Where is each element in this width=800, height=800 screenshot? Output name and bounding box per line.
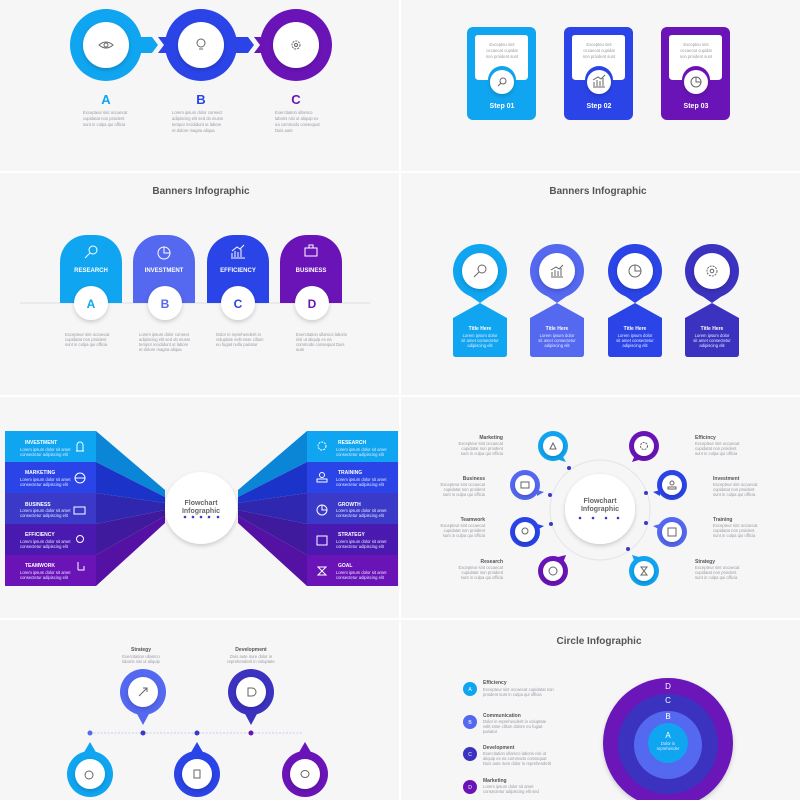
tab texts: Lorem ipsum dolor consect bbox=[139, 332, 190, 337]
text blocks ABC: Lorem ipsum dolor consect bbox=[172, 110, 223, 115]
node business bbox=[441, 470, 544, 500]
node investment bbox=[653, 470, 758, 500]
node business: cupidatat non proident bbox=[444, 487, 486, 492]
pin 3: Title Here bbox=[624, 326, 647, 332]
node teamwork: sunt in culpa qui officia bbox=[443, 533, 486, 538]
left bands: BUSINESS bbox=[25, 502, 51, 508]
left bands: Lorem ipsum dolor sit amet bbox=[20, 508, 71, 513]
pin 3: Lorem ipsum dolor bbox=[618, 333, 653, 338]
panel: banner pins bbox=[453, 186, 739, 357]
fan right bbox=[238, 431, 307, 586]
node strategy: Excepteur sint occaecat bbox=[695, 565, 740, 570]
tab business: D bbox=[308, 297, 317, 311]
node business: Business bbox=[463, 476, 485, 482]
panel: step cards bbox=[467, 27, 730, 120]
pin 4 bbox=[685, 244, 739, 357]
right bands: Lorem ipsum dolor sit amet bbox=[336, 539, 387, 544]
pin 3: adipiscing elit bbox=[622, 343, 648, 348]
right bands: consectetur adipiscing elit bbox=[336, 544, 385, 549]
card step 01: Step 01 bbox=[490, 103, 515, 110]
heading: Circle Infographic bbox=[556, 636, 642, 647]
node efficiency: cupidatat non proident bbox=[695, 446, 737, 451]
list items: velit esse cillum dolore eu fugiat bbox=[483, 724, 543, 729]
list items: aliquip ex ea commodo consequat bbox=[483, 756, 547, 761]
center circle: Infographic bbox=[182, 508, 220, 515]
tab investment bbox=[133, 235, 195, 320]
left bands: TEAMWORK bbox=[25, 563, 55, 569]
left bands: INVESTMENT bbox=[25, 440, 57, 446]
node training: Excepteur sint occaecat bbox=[713, 523, 758, 528]
center circle bbox=[565, 474, 635, 544]
node strategy: cupidatat non proident bbox=[695, 570, 737, 575]
node training bbox=[653, 517, 758, 547]
panel: banners tabs bbox=[20, 186, 370, 352]
list items: A bbox=[468, 687, 472, 693]
tab texts: voluptate velit esse cillum bbox=[216, 337, 264, 342]
card step 02 bbox=[564, 27, 633, 120]
right bands bbox=[307, 431, 398, 586]
left bands: consectetur adipiscing elit bbox=[20, 452, 69, 457]
concentric circles: Dolor in bbox=[661, 741, 676, 746]
list items: Duis aute irure dolor in reprehenderit bbox=[483, 761, 552, 766]
left bands bbox=[5, 431, 96, 586]
text blocks ABC: Excepteur sint occaecat bbox=[83, 110, 128, 115]
tab research: A bbox=[87, 297, 96, 311]
text blocks ABC: et dolore magna aliqua bbox=[172, 128, 215, 133]
circle B bbox=[165, 9, 237, 81]
pin 2 bbox=[530, 244, 584, 357]
right bands: Lorem ipsum dolor sit amet bbox=[336, 477, 387, 482]
right bands: RESEARCH bbox=[338, 440, 366, 446]
labels ABC: A bbox=[101, 92, 111, 107]
labels ABC: B bbox=[196, 92, 206, 107]
left bands: consectetur adipiscing elit bbox=[20, 544, 69, 549]
right bands: STRATEGY bbox=[338, 532, 366, 538]
center circle bbox=[165, 472, 237, 544]
label development: Development bbox=[235, 647, 267, 653]
panel: flowchart fan bbox=[5, 431, 398, 586]
node efficiency: Efficincy bbox=[695, 435, 716, 441]
node marketing: cupidatat non proident bbox=[462, 446, 504, 451]
text blocks ABC: tempor incididunt ut labore bbox=[172, 122, 222, 127]
node efficiency: sunt in culpa qui officia bbox=[695, 451, 738, 456]
tab texts: adipiscing elit sed do eiusm bbox=[139, 337, 191, 342]
heading: Banners Infographic bbox=[549, 186, 647, 197]
node efficiency: Excepteur sint occaecat bbox=[695, 441, 740, 446]
list items: Excepteur sint occaecat cupidatat non bbox=[483, 687, 554, 692]
left bands: Lorem ipsum dolor sit amet bbox=[20, 447, 71, 452]
tab research bbox=[60, 235, 122, 320]
pin 4: Title Here bbox=[701, 326, 724, 332]
node strategy: sunt in culpa qui officia bbox=[695, 575, 738, 580]
tab texts: Dolor in reprehenderit in bbox=[216, 332, 262, 337]
list items: Efficiency bbox=[483, 680, 507, 686]
list items: consectetur adipiscing elit sed bbox=[483, 789, 540, 794]
panel: circle infographic bbox=[463, 636, 733, 800]
left bands: Lorem ipsum dolor sit amet bbox=[20, 570, 71, 575]
text blocks ABC bbox=[83, 110, 321, 133]
node teamwork bbox=[441, 517, 544, 547]
card step 02: non proident sunt bbox=[583, 54, 616, 59]
tab texts: et dolore magna aliqua bbox=[139, 347, 182, 352]
pin strategy bbox=[120, 669, 166, 725]
pin bottom 2 bbox=[174, 742, 220, 797]
node teamwork: Excepteur sint occaecat bbox=[441, 523, 486, 528]
node teamwork: Teamwork bbox=[461, 517, 485, 523]
right bands: consectetur adipiscing elit bbox=[336, 575, 385, 580]
text blocks ABC: Exercitation ullamco bbox=[275, 110, 313, 115]
label strategy: Exercitation ullamco bbox=[122, 654, 160, 659]
node research: Research bbox=[480, 559, 503, 565]
connector arrows bbox=[130, 37, 272, 53]
node research: Excepteur sint occaecat bbox=[459, 565, 504, 570]
right bands: Lorem ipsum dolor sit amet bbox=[336, 570, 387, 575]
node investment: cupidatat non proident bbox=[713, 487, 755, 492]
list items: pariatur bbox=[483, 729, 498, 734]
text blocks ABC: cupidatat non proident bbox=[83, 116, 125, 121]
node training: cupidatat non proident bbox=[713, 528, 755, 533]
label development: Duis aute irure dolor in bbox=[230, 654, 273, 659]
node investment: sunt in culpa qui officia bbox=[713, 492, 756, 497]
pin bottom 1 bbox=[67, 742, 113, 797]
right bands: consectetur adipiscing elit bbox=[336, 513, 385, 518]
tab texts: nisi ut aliquip ex ea bbox=[296, 337, 332, 342]
right bands: Lorem ipsum dolor sit amet bbox=[336, 508, 387, 513]
circle A bbox=[70, 9, 142, 81]
pin 2: Title Here bbox=[546, 326, 569, 332]
tab texts: commodo consequat Duis bbox=[296, 342, 344, 347]
tab texts: cupidatat non proident bbox=[65, 337, 107, 342]
node research bbox=[459, 555, 568, 586]
concentric circles: C bbox=[665, 696, 671, 705]
label strategy: Strategy bbox=[131, 647, 151, 653]
list items: proident sunt in culpa qui officia bbox=[483, 692, 542, 697]
card step 03: Step 03 bbox=[684, 103, 709, 110]
pin 1: sit amet consectetur bbox=[461, 338, 499, 343]
node business: Excepteur sint occaecat bbox=[441, 482, 486, 487]
tab efficiency bbox=[207, 235, 269, 320]
card step 02: occaecat cupidat bbox=[583, 48, 616, 53]
node investment: Investment bbox=[713, 476, 740, 482]
labels ABC bbox=[101, 92, 301, 107]
list items: Marketing bbox=[483, 778, 507, 784]
center circle: Flowchart bbox=[184, 500, 218, 507]
pin 1: Lorem ipsum dolor bbox=[463, 333, 498, 338]
tab texts: aute bbox=[296, 347, 305, 352]
node marketing: Marketing bbox=[479, 435, 503, 441]
tab investment: INVESTMENT bbox=[145, 268, 184, 274]
panel: timeline pins bbox=[67, 647, 328, 797]
pin 3 bbox=[608, 244, 662, 357]
pin development bbox=[228, 669, 274, 725]
tab efficiency: EFFICIENCY bbox=[220, 268, 256, 274]
panel: ABC circles bbox=[70, 9, 332, 133]
node strategy: Strategy bbox=[695, 559, 715, 565]
text blocks ABC: Duis aute bbox=[275, 128, 293, 133]
pin 2: adipiscing elit bbox=[544, 343, 570, 348]
circle C bbox=[260, 9, 332, 81]
list items: Exercitation ullamco laboris nisi ut bbox=[483, 751, 547, 756]
node marketing: Excepteur sint occaecat bbox=[459, 441, 504, 446]
card step 03 bbox=[661, 27, 730, 120]
right bands: TRAINING bbox=[338, 470, 362, 476]
list items: Dolor in reprehenderit in voluptate bbox=[483, 719, 547, 724]
tab investment: B bbox=[161, 297, 170, 311]
labels ABC: C bbox=[291, 92, 301, 107]
concentric circles: B bbox=[665, 712, 671, 721]
pin 2: Lorem ipsum dolor bbox=[540, 333, 575, 338]
pin 4: sit amet consectetur bbox=[693, 338, 731, 343]
center circle: Infographic bbox=[581, 506, 619, 513]
text blocks ABC: ea commodo consequat bbox=[275, 122, 321, 127]
left bands: consectetur adipiscing elit bbox=[20, 575, 69, 580]
heading: Banners Infographic bbox=[152, 186, 250, 197]
label development bbox=[227, 647, 275, 664]
card step 02: Step 02 bbox=[587, 103, 612, 110]
concentric circles bbox=[603, 678, 733, 800]
tab texts: sunt in culpa qui officia bbox=[65, 342, 108, 347]
tab texts: Exercitation ullamco laboris bbox=[296, 332, 347, 337]
list items: D bbox=[468, 785, 472, 791]
pin 1 bbox=[453, 244, 507, 357]
label strategy bbox=[122, 647, 161, 664]
tab business bbox=[280, 235, 342, 320]
list items: Communication bbox=[483, 713, 521, 719]
pin 1: Title Here bbox=[469, 326, 492, 332]
node efficiency bbox=[629, 431, 740, 462]
concentric circles: A bbox=[665, 731, 671, 740]
tab business: BUSINESS bbox=[296, 268, 326, 274]
right bands: GOAL bbox=[338, 563, 352, 569]
list items bbox=[463, 680, 554, 794]
pin 4: Lorem ipsum dolor bbox=[695, 333, 730, 338]
card step 03: occaecat cupidat bbox=[680, 48, 713, 53]
tab texts bbox=[65, 332, 347, 352]
right bands: GROWTH bbox=[338, 502, 361, 508]
center circle: Flowchart bbox=[583, 498, 617, 505]
list items: Development bbox=[483, 745, 515, 751]
node research: cupidatat non proident bbox=[462, 570, 504, 575]
left bands: EFFICIENCY bbox=[25, 532, 55, 538]
text blocks ABC: sunt in culpa qui officia bbox=[83, 122, 126, 127]
node teamwork: cupidatat non proident bbox=[444, 528, 486, 533]
list items: B bbox=[468, 720, 472, 726]
left bands: Lorem ipsum dolor sit amet bbox=[20, 539, 71, 544]
concentric circles: reprehender bbox=[657, 746, 680, 751]
list items: Lorem ipsum dolor sit amet bbox=[483, 784, 534, 789]
tab texts: tempor incididunt ut labore bbox=[139, 342, 189, 347]
card step 01: occaecat cupidat bbox=[486, 48, 519, 53]
node research: sunt in culpa qui officia bbox=[461, 575, 504, 580]
text blocks ABC: laboris nisi ut aliquip ex bbox=[275, 116, 319, 121]
left bands: MARKETING bbox=[25, 470, 55, 476]
text blocks ABC: adipiscing elit sed do eiusm bbox=[172, 116, 224, 121]
panel: radial flowchart bbox=[441, 431, 758, 586]
pin bottom 3 bbox=[282, 742, 328, 797]
connector dots bbox=[548, 466, 648, 551]
card step 03: non proident sunt bbox=[680, 54, 713, 59]
node investment: Excepteur sint occaecat bbox=[713, 482, 758, 487]
node marketing bbox=[459, 431, 568, 462]
node strategy bbox=[629, 555, 740, 586]
pin 3: sit amet consectetur bbox=[616, 338, 654, 343]
right bands: consectetur adipiscing elit bbox=[336, 452, 385, 457]
node marketing: sunt in culpa qui officia bbox=[461, 451, 504, 456]
pin 2: sit amet consectetur bbox=[538, 338, 576, 343]
node business: sunt in culpa qui officia bbox=[443, 492, 486, 497]
card step 03: Excepteu sint bbox=[683, 42, 709, 47]
card step 01: Excepteu sint bbox=[489, 42, 515, 47]
tab texts: eu fugiat nulla pariatur bbox=[216, 342, 258, 347]
label strategy: laboris nisi ut aliquip bbox=[122, 659, 161, 664]
card step 01 bbox=[467, 27, 536, 120]
pin 4: adipiscing elit bbox=[699, 343, 725, 348]
right bands: Lorem ipsum dolor sit amet bbox=[336, 447, 387, 452]
tab texts: Excepteur sint occaecat bbox=[65, 332, 110, 337]
fan left bbox=[96, 431, 165, 586]
card step 01: non proident sunt bbox=[486, 54, 519, 59]
left bands: Lorem ipsum dolor sit amet bbox=[20, 477, 71, 482]
label development: reprehenderit in voluptate bbox=[227, 659, 275, 664]
concentric circles: D bbox=[665, 682, 671, 691]
left bands: consectetur adipiscing elit bbox=[20, 482, 69, 487]
node training: Training bbox=[713, 517, 732, 523]
card step 02: Excepteu sint bbox=[586, 42, 612, 47]
tab research: RESEARCH bbox=[74, 268, 108, 274]
list items: C bbox=[468, 752, 472, 758]
left bands: consectetur adipiscing elit bbox=[20, 513, 69, 518]
tab efficiency: C bbox=[234, 297, 243, 311]
node training: sunt in culpa qui officia bbox=[713, 533, 756, 538]
pin 1: adipiscing elit bbox=[467, 343, 493, 348]
right bands: consectetur adipiscing elit bbox=[336, 482, 385, 487]
